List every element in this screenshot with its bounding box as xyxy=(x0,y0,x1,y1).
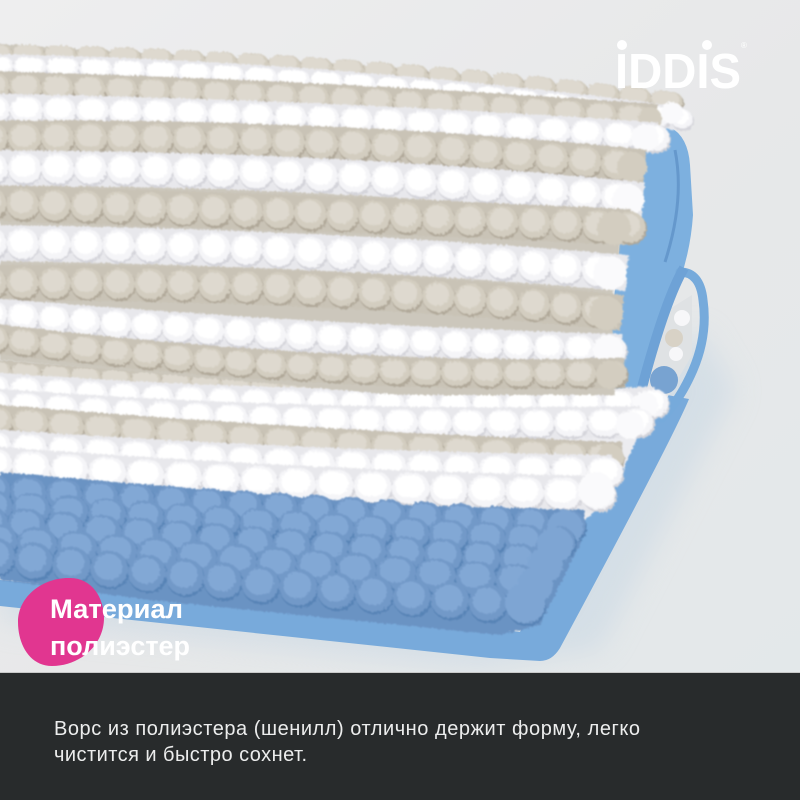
heading: material: Материал xyxy=(50,594,183,624)
flat mat: blue rows xyxy=(0,472,585,635)
heading: material: полиэстер xyxy=(50,631,190,661)
description text xyxy=(54,718,640,766)
fabric backing of the rolled end xyxy=(605,125,704,418)
ground shadow of the mat xyxy=(0,330,735,668)
rolled mat: striped rows xyxy=(0,44,684,395)
description text: чистится и быстро сохнет. xyxy=(54,744,307,766)
pink blob badge xyxy=(18,578,104,666)
logo: IDDIS: IDDIS xyxy=(615,45,741,99)
description text: Ворс из полиэстера (шенилл) отлично держит форму, легко xyxy=(54,718,640,740)
dark footer panel xyxy=(0,672,800,800)
fabric backing of the flat mat xyxy=(0,390,689,661)
photo: rolled bath mat xyxy=(0,44,704,661)
logo: IDDIS: ® xyxy=(741,41,747,50)
heading: material xyxy=(50,594,190,661)
flat mat: white and beige rows xyxy=(0,360,658,520)
